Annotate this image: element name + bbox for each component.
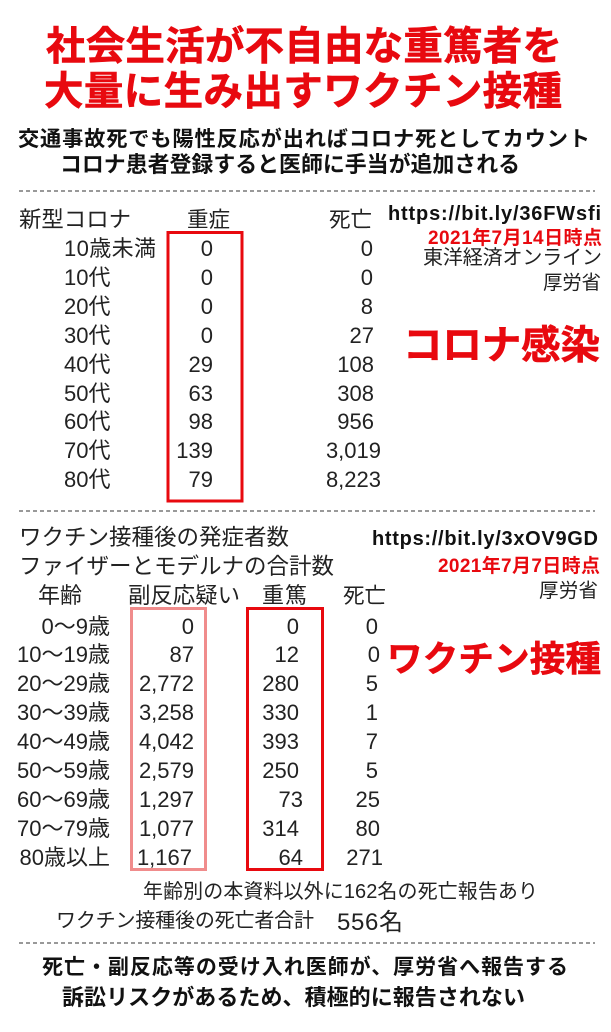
source: corona: 東洋経済オンライン [423,246,602,269]
subtitle: コロナ患者登録すると医師に手当が追加される [60,152,520,177]
source: vaccination: https://bit.ly/3xOV9GD [372,528,598,550]
severe case values: 139 [176,438,213,463]
severe case values: 79 [189,467,213,492]
age labels: 10代 [64,265,110,290]
note: total deaths [56,909,403,936]
death values: 7 [366,729,378,754]
source: corona [388,203,602,294]
red highlight box [168,232,242,501]
table header: 新型コロナ [19,207,131,232]
age labels: 80歳以上 [20,845,110,870]
severe case values: 98 [189,409,213,434]
age labels: 50代 [64,381,110,406]
serious case values: 280 [262,671,299,696]
serious case values: 330 [262,700,299,725]
death values: 308 [337,381,374,406]
table header: 死亡 [343,584,386,608]
red highlight box [248,608,322,870]
conclusion: 訴訟リスクがあるため、積極的に報告されない [62,985,525,1010]
death values: 8,223 [326,467,381,492]
suspected side effect values: 4,042 [139,729,194,754]
table: vaccination [17,525,386,870]
death values: 25 [356,787,380,812]
suspected side effect values [137,614,194,870]
severe case values: 0 [201,265,213,290]
subtitle [18,126,590,177]
serious case values: 250 [262,758,299,783]
age labels: 70代 [64,438,110,463]
severe case values: 0 [201,323,213,348]
death values [326,236,381,492]
title [44,25,562,114]
source: corona: 2021年7月14日時点 [428,226,602,249]
table heading [19,525,334,579]
table header: 年齢 [38,583,82,608]
table header: 重症 [187,208,230,232]
age labels: 20～29歳 [17,671,110,696]
death values: 0 [366,614,378,639]
note: total deaths: ワクチン接種後の死亡者合計 [56,909,314,932]
suspected side effect values: 2,579 [139,758,194,783]
source: corona: https://bit.ly/36FWsfi [388,203,601,225]
suspected side effect values: 3,258 [139,700,194,725]
age labels [64,236,156,492]
age labels: 10～19歳 [17,642,110,667]
serious case values: 0 [287,614,299,639]
death values: 0 [361,236,373,261]
table: corona infection [19,207,381,501]
note: additional deaths: 年齢別の本資料以外に162名の死亡報告あり [143,880,538,903]
serious case values: 393 [262,729,299,754]
source: vaccination: 厚労省 [539,580,598,602]
suspected side effect values: 1,297 [139,787,194,812]
title: 大量に生み出すワクチン接種 [44,70,562,114]
label: vaccination: ワクチン接種 [387,639,601,679]
severe case values: 29 [189,352,213,377]
age labels: 60代 [64,409,110,434]
death values: 5 [366,758,378,783]
age labels: 70～79歳 [17,816,110,841]
serious case values: 64 [279,845,303,870]
source: vaccination [372,528,600,602]
table heading: ファイザーとモデルナの合計数 [19,554,334,579]
table header [19,207,372,232]
age labels: 30代 [64,323,110,348]
note: total deaths: 556名 [337,909,403,936]
death values: 5 [366,671,378,696]
conclusion [42,955,568,1010]
severe case values: 0 [201,294,213,319]
suspected side effect values: 1,167 [137,845,192,870]
suspected side effect values: 2,772 [139,671,194,696]
serious case values: 12 [275,642,299,667]
severe case values: 0 [201,236,213,261]
suspected side effect values: 87 [170,642,194,667]
age labels: 80代 [64,467,110,492]
age labels [17,614,110,870]
serious case values: 73 [279,787,303,812]
death values: 3,019 [326,438,381,463]
source: corona: 厚労省 [543,272,601,294]
serious case values [262,614,303,870]
death values: 80 [356,816,380,841]
subtitle: 交通事故死でも陽性反応が出ればコロナ死としてカウント [18,126,590,151]
suspected side effect values: 1,077 [139,816,194,841]
death values: 27 [350,323,374,348]
age labels: 10歳未満 [64,236,156,261]
table heading: ワクチン接種後の発症者数 [19,525,289,550]
title: 社会生活が不自由な重篤者を [46,25,562,69]
death values [346,614,383,870]
death values: 0 [368,642,380,667]
age labels: 60～69歳 [17,787,110,812]
severe case values: 63 [189,381,213,406]
age labels: 20代 [64,294,110,319]
death values: 1 [366,700,378,725]
serious case values: 314 [262,816,299,841]
age labels: 40代 [64,352,110,377]
death values: 956 [337,409,374,434]
table header: 重篤 [262,583,307,608]
label: corona infection: コロナ感染 [403,324,600,368]
table header: 副反応疑い [128,583,240,608]
death values: 271 [346,845,383,870]
pink highlight box [132,608,206,870]
suspected side effect values: 0 [182,614,194,639]
table header [38,583,386,608]
death values: 8 [361,294,373,319]
table header: 死亡 [329,208,372,232]
age labels: 50～59歳 [17,758,110,783]
age labels: 30～39歳 [17,700,110,725]
death values: 0 [361,265,373,290]
severe case values [176,236,213,492]
conclusion: 死亡・副反応等の受け入れ医師が、厚労省へ報告する [42,955,568,979]
source: vaccination: 2021年7月7日時点 [438,554,600,577]
age labels: 0～9歳 [42,614,110,639]
death values: 108 [337,352,374,377]
age labels: 40～49歳 [17,729,110,754]
